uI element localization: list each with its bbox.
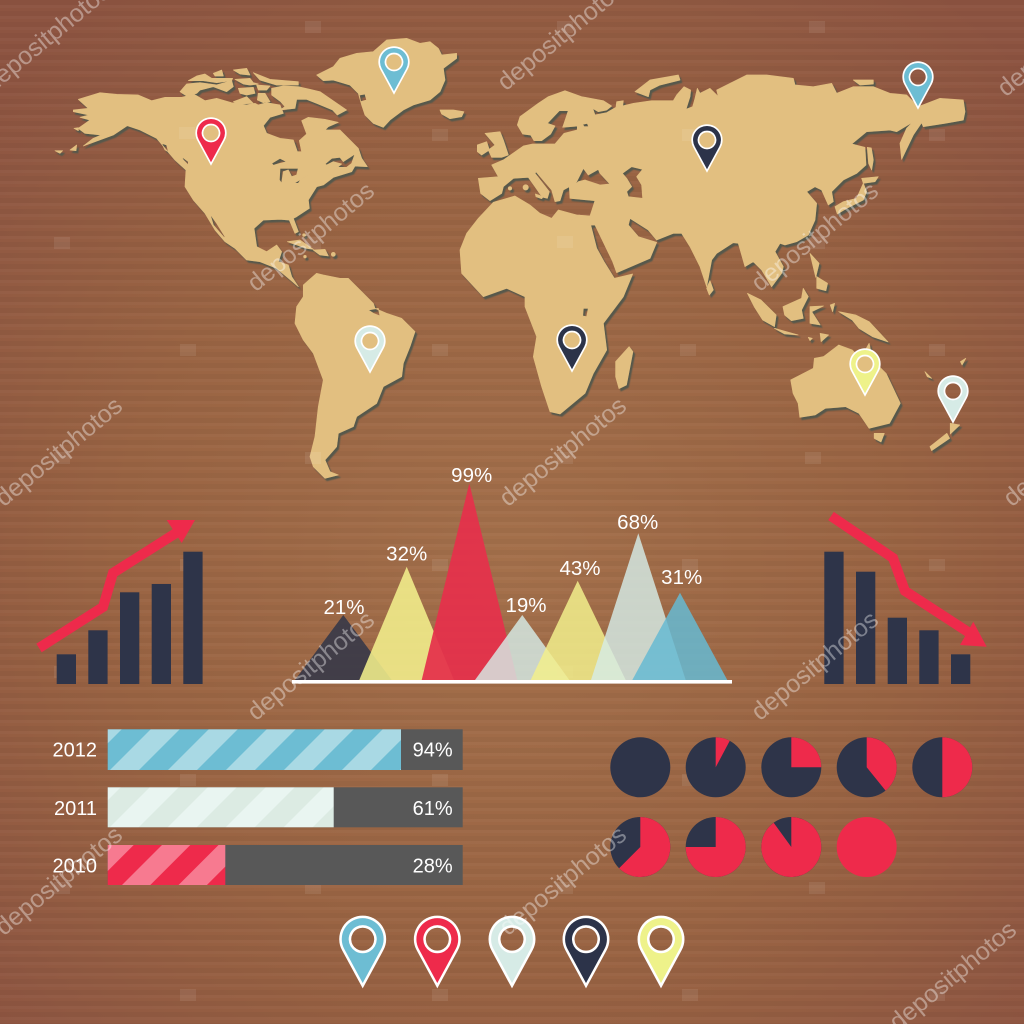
map pin: Greenland [379,47,409,93]
Europe islands [477,75,680,199]
bar 2010 [52,845,463,885]
East Asian islands [707,80,878,295]
map pin: Australia [850,349,880,395]
bar 2012: 94% [413,740,453,762]
watermarks: depositphotos [242,606,380,726]
pie 5 [912,737,972,797]
triangle labels [323,464,702,619]
Greenland, Iceland, South America [295,38,464,478]
pin legend row [340,917,683,986]
watermarks: depositphotos [746,177,884,297]
watermarks: depositphotos [242,177,380,297]
map pin: Africa [557,325,587,371]
pie charts [610,737,972,877]
watermarks: depositphotos [746,606,884,726]
triangle labels: 32% [386,543,427,566]
pie 9 [837,817,897,877]
map pin: South America [355,326,385,372]
map pin: Central Asia [692,125,722,171]
bar 2010: 28% [413,856,453,878]
pin: yellow [639,917,683,986]
pie 7 [686,817,746,877]
triangle labels: 31% [661,566,702,589]
Eurasia and Africa [460,75,965,414]
world map [55,38,966,478]
pin: navy [564,917,608,986]
watermarks: depositphotos [494,821,632,941]
triangle labels: 68% [617,511,658,534]
triangle labels: 99% [451,464,492,487]
Alaskan and Caribbean islands [55,128,335,258]
bar 2010: 2010 [52,856,97,878]
falling arrow [831,516,987,647]
pie 4 [837,737,897,797]
pie 3 [761,737,821,797]
bar 2011 [54,787,463,827]
pin: pale green [490,917,534,986]
bar 2011: 2011 [54,798,97,820]
North America [55,68,367,287]
pie 2 [686,737,746,797]
pin: blue [340,917,385,986]
pin: red [415,917,460,986]
rising arrow [39,520,195,648]
progress bars [52,729,463,885]
rising bar chart [39,520,203,684]
falling bar chart [824,516,987,684]
map pin: North America [196,118,226,164]
pie 8 [761,817,821,877]
bar 2011: 61% [413,798,453,820]
pie 1 [610,737,670,797]
map pin: Siberia [903,62,933,108]
triangle labels: 43% [559,557,601,580]
triangle labels: 21% [323,596,365,619]
pie 6 [610,817,670,877]
Indian Ocean and Oceania islands [616,253,966,451]
watermarks: depositphotos [494,392,632,512]
map pin: New Zealand [938,376,968,422]
bar 2012 [52,729,463,770]
bar 2012: 2012 [52,740,97,762]
Arctic islands [180,68,347,115]
triangle chart [292,464,732,684]
triangle labels: 19% [505,594,547,617]
